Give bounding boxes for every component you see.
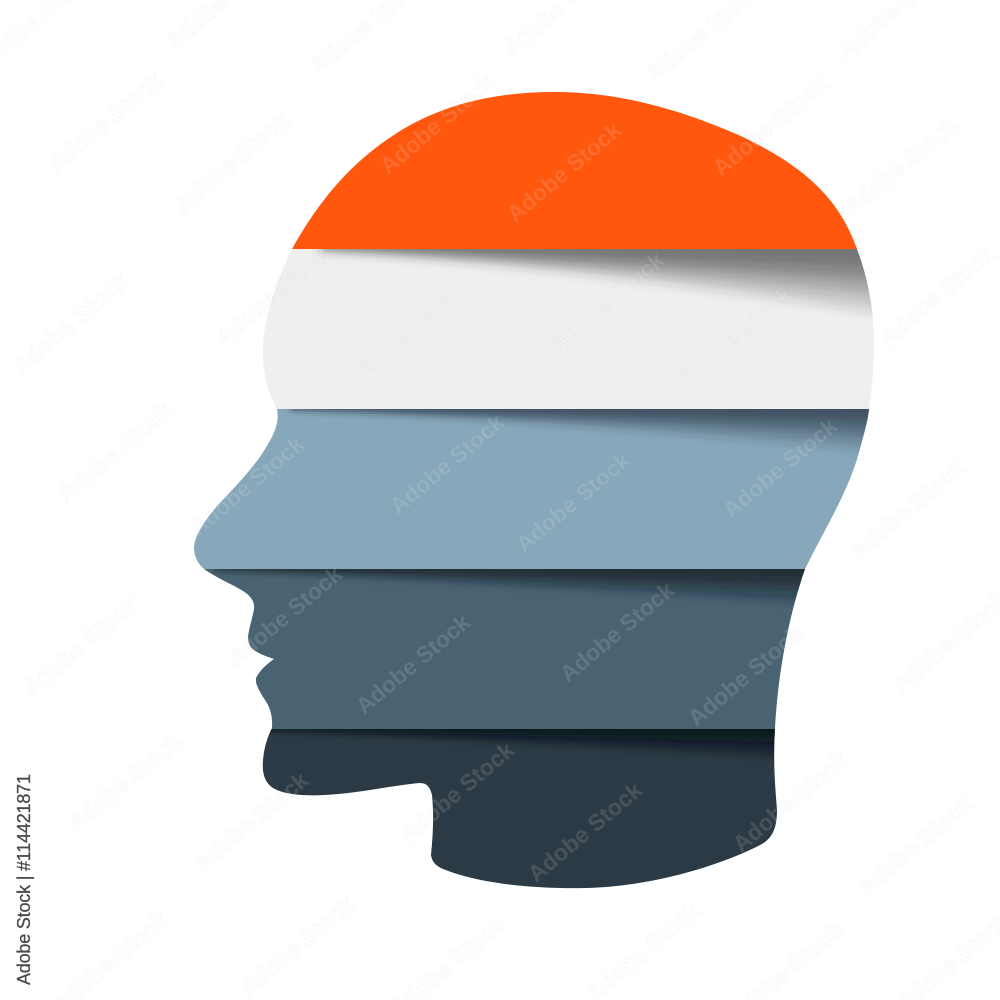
watermark pattern: Adobe Stock [8, 269, 132, 379]
watermark pattern: Adobe Stock [545, 247, 669, 357]
band 5: dark navy [262, 729, 777, 888]
credit text, vertical: Adobe Stock | #114421871 [14, 774, 34, 985]
watermark pattern: Adobe Stock [728, 747, 852, 857]
head silhouette with stacked bands [194, 92, 874, 888]
watermark pattern: Adobe Stock [839, 111, 963, 221]
watermark pattern: Adobe Stock [223, 561, 347, 671]
watermark pattern: Adobe Stock [341, 279, 465, 389]
watermark pattern: Adobe Stock [673, 281, 797, 391]
band 2: light grey [263, 249, 874, 409]
watermark pattern: Adobe Stock [502, 117, 626, 227]
watermark pattern: Adobe Stock [555, 577, 679, 687]
watermark pattern: Adobe Stock [845, 455, 969, 565]
watermark pattern: Adobe Stock [53, 397, 177, 507]
watermark pattern: Adobe Stock [235, 891, 359, 1000]
watermark pattern: Adobe Stock [395, 737, 519, 847]
watermark pattern: Adobe Stock [375, 69, 499, 179]
watermark pattern: Adobe Stock [718, 413, 842, 523]
watermark pattern: Adobe Stock [853, 791, 977, 901]
band 4: slate [204, 569, 805, 729]
band 3: light blue [194, 409, 869, 569]
watermark pattern: Adobe Stock [210, 241, 334, 351]
watermark pattern: Adobe Stock [875, 241, 999, 351]
watermark pattern: Adobe Stock [683, 621, 807, 731]
watermark pattern: Adobe Stock [189, 767, 313, 877]
watermark pattern: Adobe Stock [63, 727, 187, 837]
watermark pattern: Adobe Stock [170, 107, 294, 217]
watermark pattern: Adobe Stock [43, 67, 167, 177]
watermark pattern: Adobe Stock [351, 609, 475, 719]
band 1: orange crown [292, 92, 857, 249]
watermark pattern: Adobe Stock [18, 591, 142, 701]
watermark pattern: Adobe Stock [185, 431, 309, 541]
watermark pattern: Adobe Stock [511, 447, 635, 557]
watermark pattern: Adobe Stock [708, 71, 832, 181]
watermark pattern: Adobe Stock [385, 409, 509, 519]
watermark pattern: Adobe Stock [523, 777, 647, 887]
